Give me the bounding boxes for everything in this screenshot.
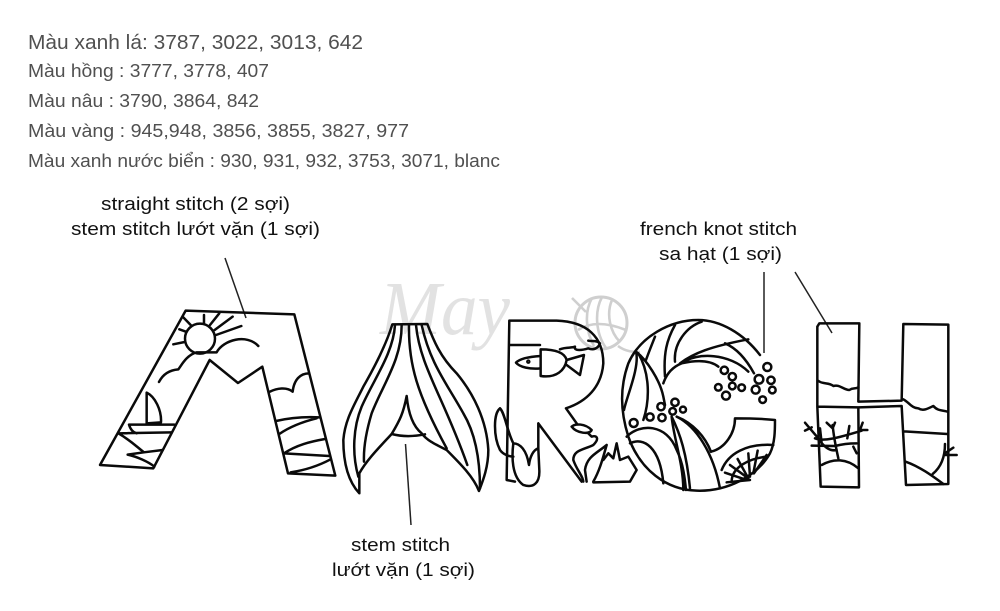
callout: straight stitch: stem stitch lướt vặn (1 sợi) <box>71 218 320 239</box>
thread colour list: Màu hồng : 3777, 3778, 407 <box>28 60 269 81</box>
callout: stem stitch: stem stitch <box>351 534 450 555</box>
callout: french knot stitch: sa hạt (1 sợi) <box>659 243 782 264</box>
thread colour list: Màu xanh lá: 3787, 3022, 3013, 642 <box>28 31 363 54</box>
thread colour list <box>28 31 500 171</box>
icon: fish <box>516 349 584 376</box>
icon: sun <box>173 313 241 354</box>
icon: right branch <box>906 444 957 484</box>
callout: stem stitch <box>332 444 475 580</box>
callout: french knot stitch <box>640 218 832 353</box>
watermark: May with yarn ball <box>379 267 640 352</box>
icon: bare tree <box>805 423 867 468</box>
callout: straight stitch: straight stitch (2 sợi) <box>101 193 290 214</box>
wavy horizon <box>818 381 947 412</box>
letter H: landscape with trees <box>805 323 957 487</box>
leaves <box>624 322 754 490</box>
letter R: fish and seaweed <box>495 321 637 486</box>
french knots <box>630 363 776 427</box>
letter C: tropical leaves and french knots <box>622 320 776 491</box>
thread colour list: Màu nâu : 3790, 3864, 842 <box>28 90 259 111</box>
callout: straight stitch <box>71 193 320 318</box>
watermark: May with yarn ball: May <box>379 267 510 351</box>
callout: stem stitch: lướt vặn (1 sợi) <box>332 559 475 580</box>
icon: sailboat <box>119 393 174 433</box>
letter A: mountain, sun and sea <box>100 311 335 476</box>
waves <box>118 417 331 472</box>
thread colour list: Màu vàng : 945,948, 3856, 3855, 3827, 977 <box>28 120 409 141</box>
thread colour list: Màu xanh nước biển : 930, 931, 932, 3753, 3071, blanc <box>28 150 500 171</box>
clouds <box>159 339 309 392</box>
callout: french knot stitch: french knot stitch <box>640 218 797 239</box>
letter M: mermaid tail <box>343 324 488 493</box>
seaweed and grass <box>495 408 637 486</box>
fan shell <box>722 445 773 482</box>
